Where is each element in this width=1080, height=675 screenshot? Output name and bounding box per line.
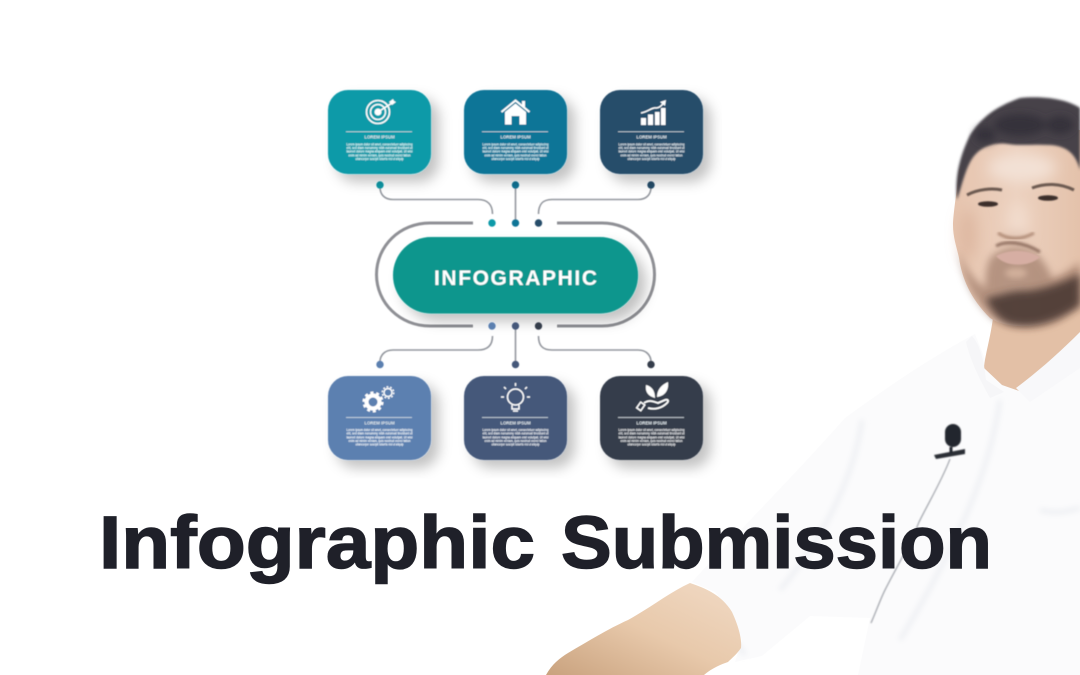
body text: ullamcorper suscipit lobortis nisl ut aliquip <box>356 157 404 161</box>
title: Submission <box>561 501 992 584</box>
infographic diagram <box>328 90 703 460</box>
body text: laoreet dolore magna aliquam erat volutpat. Ut wisi <box>618 150 685 154</box>
body text: ullamcorper suscipit lobortis nisl ut aliquip <box>492 157 540 161</box>
body text: ullamcorper suscipit lobortis nisl ut aliquip <box>356 443 404 447</box>
body text <box>346 142 413 161</box>
body text <box>482 142 549 161</box>
panel: growth chart card: LOREM IPSUM <box>636 134 667 140</box>
collar <box>966 332 1080 402</box>
body text: elit, sed diam nonummy nibh euismod tincidunt ut <box>618 146 685 150</box>
panel: target card: LOREM IPSUM <box>364 134 395 140</box>
lapel microphone <box>871 424 965 623</box>
body text: enim ad minim veniam, quis nostrud exerci tation <box>484 439 546 443</box>
icon: lightbulb <box>501 383 530 411</box>
shirt <box>692 334 1080 675</box>
panel: plant in hand card: LOREM IPSUM <box>636 420 667 426</box>
panel: gears card <box>328 376 431 460</box>
panel: home card: LOREM IPSUM <box>500 134 531 140</box>
icon: target <box>366 99 396 124</box>
beard <box>958 243 1080 328</box>
icon: gears <box>364 387 394 411</box>
hair <box>956 97 1080 200</box>
arm <box>546 583 741 675</box>
body text: enim ad minim veniam, quis nostrud exerci tation <box>348 439 410 443</box>
body text: Lorem ipsum dolor sit amet, consectetuer adipiscing <box>618 142 684 146</box>
body text: laoreet dolore magna aliquam erat volutpat. Ut wisi <box>482 150 549 154</box>
connectors <box>380 187 651 362</box>
panel: gears card: LOREM IPSUM <box>364 420 395 426</box>
icon: house <box>502 100 530 124</box>
title <box>99 501 992 584</box>
body text: elit, sed diam nonummy nibh euismod tincidunt ut <box>618 432 685 436</box>
icon: plant in hand <box>637 382 668 411</box>
center capsule <box>393 237 638 314</box>
body text: ullamcorper suscipit lobortis nisl ut aliquip <box>492 443 540 447</box>
panel: growth chart card <box>600 90 703 174</box>
body text: laoreet dolore magna aliquam erat volutpat. Ut wisi <box>346 150 413 154</box>
body text: laoreet dolore magna aliquam erat volutpat. Ut wisi <box>482 435 549 439</box>
presenter photo <box>546 97 1080 675</box>
mouth <box>996 251 1040 265</box>
body text: Lorem ipsum dolor sit amet, consectetuer adipiscing <box>482 142 548 146</box>
face <box>953 130 1080 326</box>
body text: elit, sed diam nonummy nibh euismod tincidunt ut <box>482 146 549 150</box>
panel: lightbulb card <box>464 376 567 460</box>
connector dots <box>376 181 655 368</box>
body text: laoreet dolore magna aliquam erat volutpat. Ut wisi <box>618 435 685 439</box>
body text: enim ad minim veniam, quis nostrud exerci tation <box>348 153 410 157</box>
body text: ullamcorper suscipit lobortis nisl ut aliquip <box>628 443 676 447</box>
facial shading <box>960 154 1056 261</box>
body text: Lorem ipsum dolor sit amet, consectetuer adipiscing <box>346 142 412 146</box>
body text: elit, sed diam nonummy nibh euismod tincidunt ut <box>482 432 549 436</box>
panel: home card <box>464 90 567 174</box>
panel: lightbulb card: LOREM IPSUM <box>500 420 531 426</box>
body text <box>618 428 685 447</box>
body text: enim ad minim veniam, quis nostrud exerci tation <box>484 153 546 157</box>
body text: elit, sed diam nonummy nibh euismod tincidunt ut <box>346 432 413 436</box>
body text: enim ad minim veniam, quis nostrud exerci tation <box>620 439 682 443</box>
body text <box>618 142 685 161</box>
body text: Lorem ipsum dolor sit amet, consectetuer adipiscing <box>346 428 412 432</box>
capsule label: INFOGRAPHIC <box>434 267 597 290</box>
neck <box>984 290 1080 392</box>
body text: Lorem ipsum dolor sit amet, consectetuer adipiscing <box>482 428 548 432</box>
body text <box>346 428 413 447</box>
body text: elit, sed diam nonummy nibh euismod tincidunt ut <box>346 146 413 150</box>
eyes and brows <box>967 184 1074 238</box>
body text <box>482 428 549 447</box>
panel: target card <box>328 90 431 174</box>
capsule outline <box>376 223 654 326</box>
panel: plant in hand card <box>600 376 703 460</box>
body text: ullamcorper suscipit lobortis nisl ut aliquip <box>628 157 676 161</box>
title: Infographic <box>99 501 535 584</box>
icon: growth chart <box>641 100 666 125</box>
body text: enim ad minim veniam, quis nostrud exerci tation <box>620 153 682 157</box>
body text: Lorem ipsum dolor sit amet, consectetuer adipiscing <box>618 428 684 432</box>
body text: laoreet dolore magna aliquam erat volutpat. Ut wisi <box>346 435 413 439</box>
